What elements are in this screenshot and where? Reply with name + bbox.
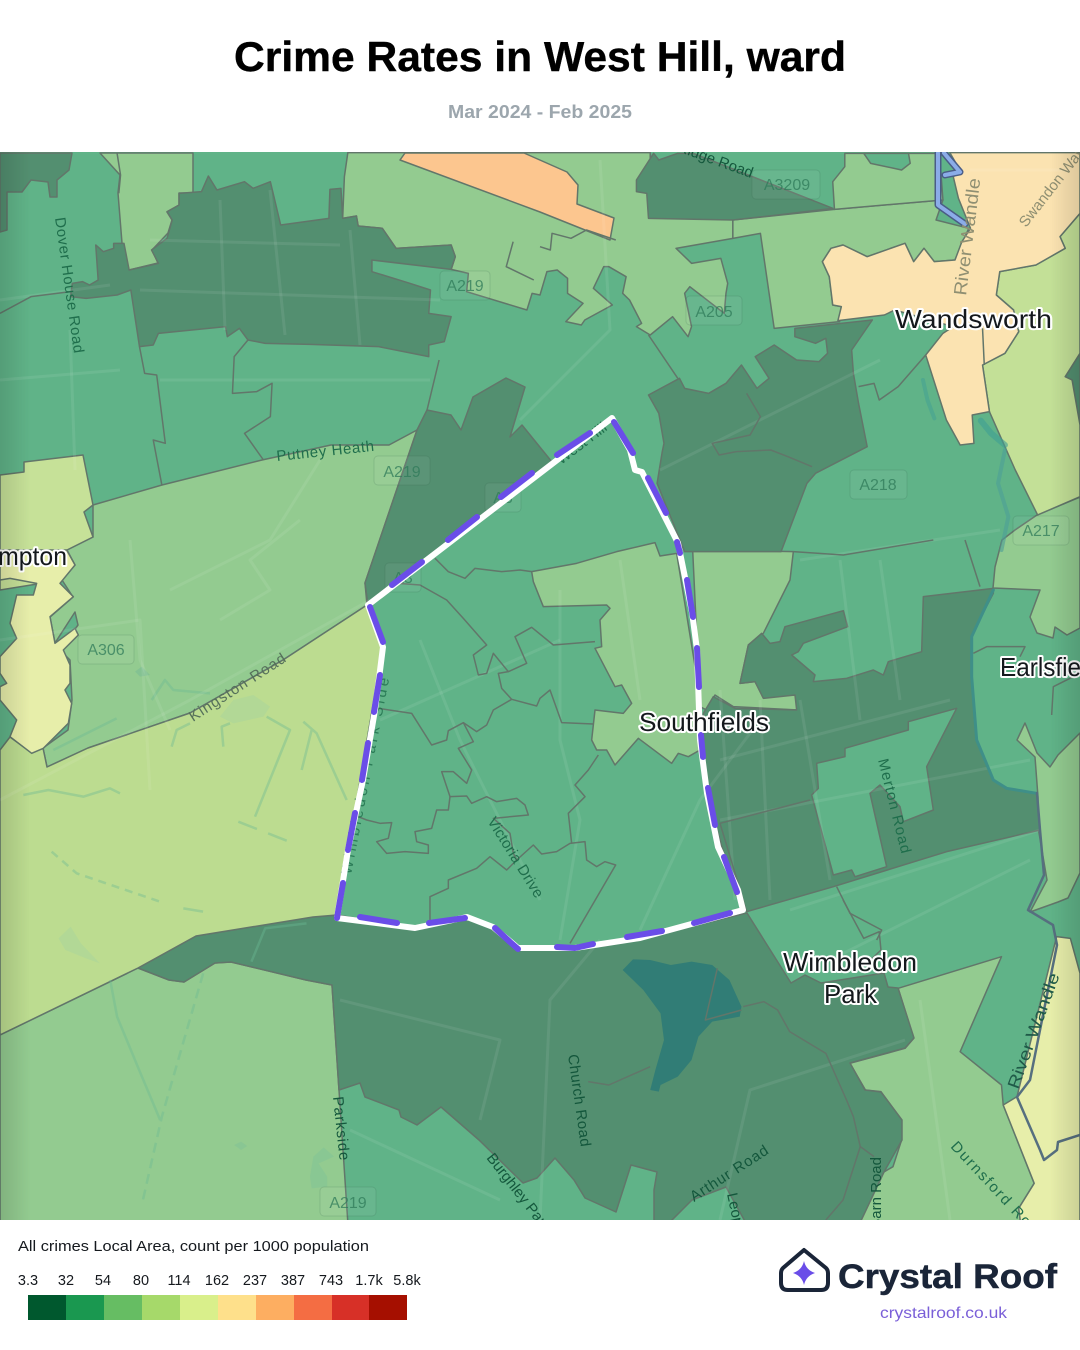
road shields: A218 — [859, 477, 897, 494]
road shields: A3 — [393, 570, 413, 587]
road shields: A306 — [87, 642, 125, 659]
road labels: River Wandle — [1004, 970, 1063, 1091]
road shields: A219 — [329, 1195, 367, 1212]
legend scale values: 80 — [133, 1273, 149, 1289]
district boundary lines — [0, 153, 1080, 1220]
road labels under the ward boundary: Wimbledon Park Side — [338, 676, 393, 876]
road labels: Leopold — [723, 1191, 751, 1247]
river Wandle and water course — [923, 153, 1080, 1160]
road shields: A219 — [446, 278, 484, 295]
road labels: Kingston Road — [186, 650, 289, 725]
title: Crime Rates in West Hill, ward — [234, 33, 846, 80]
place labels: Park — [824, 979, 878, 1009]
logo wordmark: Crystal Roof — [838, 1258, 1058, 1296]
road labels: Parkside — [329, 1096, 353, 1161]
legend scale values: 387 — [281, 1273, 305, 1289]
map areas: crime rate polygons — [0, 153, 1080, 1225]
icon: house with star — [781, 1250, 828, 1290]
road labels: Durnsford Road — [947, 1138, 1048, 1245]
legend scale values: 237 — [243, 1273, 267, 1289]
logo: Crystal Roof — [781, 1250, 1058, 1322]
legend colour bar — [28, 1295, 407, 1320]
legend scale values: 114 — [167, 1273, 191, 1289]
legend scale values: 3.3 — [18, 1273, 38, 1289]
road labels: Putney Heath — [276, 438, 375, 465]
road shields: A205 — [695, 304, 733, 321]
road labels: Merton Road — [874, 757, 914, 855]
road labels — [51, 139, 1080, 1247]
road labels: Victoria Drive — [484, 814, 547, 901]
ward boundary: West Hill — [337, 418, 743, 949]
legend scale values: 5.8k — [393, 1273, 421, 1289]
place labels: Wandsworth — [895, 304, 1052, 334]
place labels — [0, 304, 1080, 1009]
road shields: A3209 — [764, 177, 810, 194]
website url: crystalroof.co.uk — [880, 1305, 1008, 1322]
place labels: Wimbledon — [783, 947, 917, 977]
road labels: Ridge Road — [675, 139, 755, 182]
road labels: Burghley Park — [483, 1150, 555, 1235]
legend scale values: 54 — [95, 1273, 111, 1289]
road labels: Dover House Road — [51, 216, 87, 354]
legend scale values: 32 — [58, 1273, 74, 1289]
road network — [0, 160, 1070, 1220]
road labels under the ward boundary — [338, 419, 610, 876]
road labels: Church Road — [564, 1053, 594, 1148]
legend scale values: 1.7k — [355, 1273, 383, 1289]
water: Wimbledon Park lake — [623, 959, 741, 1092]
ponds and paths on the commons — [23, 667, 347, 1200]
road labels: Barn Road — [868, 1157, 885, 1229]
legend scale values — [18, 1273, 421, 1289]
subtitle: date range: Mar 2024 - Feb 2025 — [448, 102, 632, 122]
road labels: Arthur Road — [687, 1142, 772, 1205]
legend scale values: 743 — [319, 1273, 343, 1289]
legend title: All crimes Local Area, count per 1000 population — [18, 1239, 369, 1255]
place labels: Southfields — [639, 707, 769, 737]
road labels under the ward boundary: West Hill — [553, 419, 610, 468]
road labels: River Wandle — [950, 177, 984, 296]
road shields: A219 — [383, 464, 421, 481]
road shields — [78, 170, 1069, 1216]
legend scale values: 162 — [205, 1273, 229, 1289]
legend — [18, 1239, 421, 1320]
road shields: A217 — [1022, 523, 1060, 540]
road shields: A3 — [493, 490, 513, 507]
